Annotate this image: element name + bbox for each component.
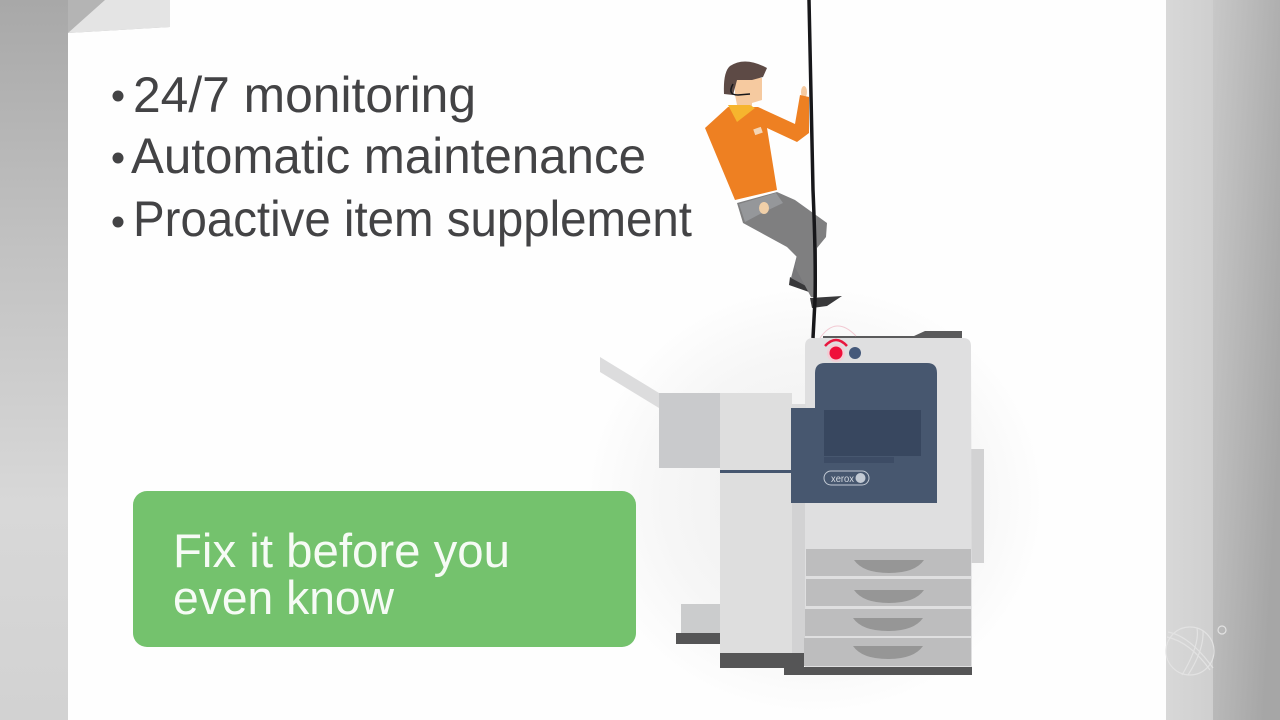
blue control panel <box>791 363 937 503</box>
callout: green box: even know <box>173 571 395 624</box>
raised hand <box>801 86 807 98</box>
printer base <box>784 667 972 675</box>
callout: green box: Fix it before you <box>173 524 510 577</box>
headset <box>731 84 750 95</box>
printer side column <box>792 503 806 653</box>
printer top scanner lid <box>823 331 962 340</box>
bullet: Proactive item supplement: Proactive item supplement <box>133 191 692 247</box>
finisher grey box <box>659 393 720 468</box>
icon: folded paper corner <box>68 0 170 33</box>
rope <box>809 0 815 338</box>
front shoe <box>810 296 842 308</box>
hair <box>724 61 767 95</box>
paper trays <box>804 549 971 666</box>
printer right side panel <box>971 449 984 563</box>
lower paper stack <box>676 604 720 644</box>
shirt badge <box>753 127 763 135</box>
callout: green box <box>133 491 636 647</box>
torso and arm <box>705 95 809 200</box>
soft shadow behind printer <box>585 285 1045 715</box>
bullet: Automatic maintenance: Automatic maintenance <box>131 128 646 184</box>
finisher column <box>720 393 804 668</box>
output tray <box>600 357 659 408</box>
face <box>735 78 762 110</box>
icon: person on rope <box>705 0 842 338</box>
hand on lap <box>759 202 769 214</box>
back shoe <box>789 277 809 292</box>
xerox logo badge <box>824 471 869 485</box>
icon: printer <box>600 326 984 675</box>
back lower leg <box>791 248 814 286</box>
printer body <box>805 338 972 667</box>
trouser highlight <box>739 193 783 222</box>
person <box>705 61 842 308</box>
bullet list <box>112 67 692 247</box>
collar <box>728 105 755 122</box>
xerox logo badge: xerox <box>831 473 855 485</box>
watermark: xerox logo <box>1166 626 1226 675</box>
trousers <box>737 192 827 297</box>
bullet: 24/7 monitoring: 24/7 monitoring <box>133 67 476 123</box>
alarm indicator <box>820 326 861 362</box>
